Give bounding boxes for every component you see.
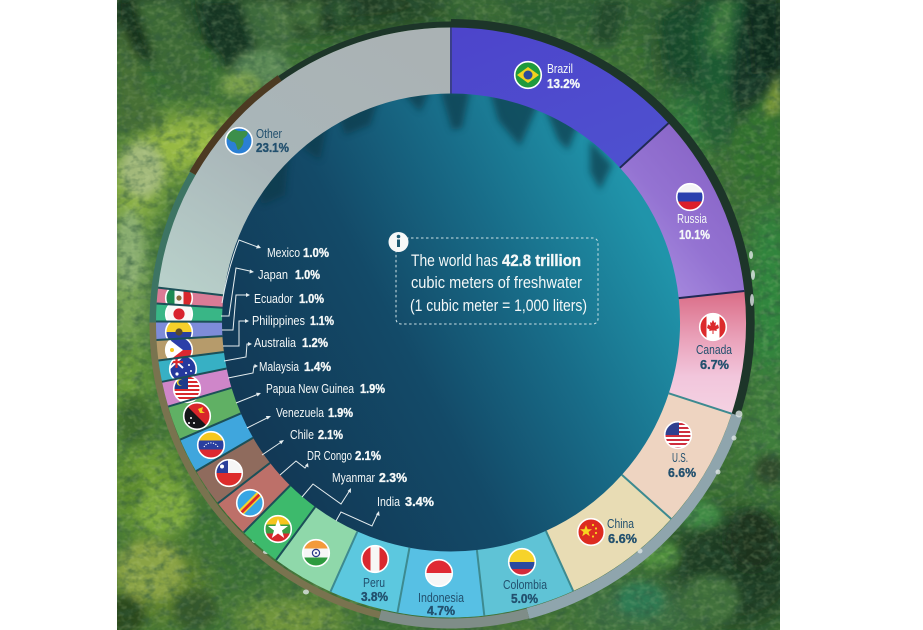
segment: Other 23.1% — [158, 28, 451, 295]
segment: Indonesia 4.7% — [398, 548, 484, 618]
label: DR Congo: DR Congo — [307, 448, 352, 463]
icon: flag of Venezuela — [198, 432, 224, 458]
callout: total freshwater: (1 cubic meter = 1,000 liters) — [410, 296, 587, 315]
segment: Canada 6.7%: 6.7% — [700, 357, 729, 372]
segment: U.S. 6.6%: U.S. — [672, 450, 688, 465]
segment: Indonesia 4.7%: 4.7% — [427, 603, 455, 618]
segment: Brazil 13.2% — [451, 27, 668, 168]
icon: flag of India — [303, 540, 329, 566]
segment: Canada 6.7% — [669, 291, 746, 414]
segment: China 6.6%: 6.6% — [608, 531, 637, 546]
label: Philippines: Philippines — [252, 313, 305, 328]
segment: Mexico 1.0% — [157, 285, 224, 311]
segment: Canada 6.7%: Canada — [696, 342, 733, 357]
label: India — [336, 494, 434, 526]
icon: flag of Peru — [362, 546, 388, 572]
label: Venezuela: 1.9% — [328, 405, 353, 420]
segment: Russia 10.1% — [620, 123, 744, 298]
label: Venezuela: Venezuela — [276, 405, 325, 420]
icon: flag of Ecuador — [164, 322, 194, 338]
icon: flag of Colombia — [509, 549, 535, 576]
segment: Colombia 5.0% — [477, 531, 573, 616]
label: Australia: 1.2% — [302, 335, 328, 350]
icon: info — [388, 232, 408, 252]
icon: flag of Papua New Guinea — [184, 403, 210, 429]
label: Australia — [224, 335, 328, 361]
label: Ecuador — [222, 291, 324, 330]
segment: Japan 1.0% — [156, 304, 222, 321]
segment: Ecuador 1.0% — [156, 322, 222, 340]
segment: Indonesia 4.7%: Indonesia — [418, 590, 465, 605]
callout labels for the smallest countries — [221, 240, 434, 526]
label: Chile — [262, 427, 343, 455]
segment: China 6.6% — [546, 475, 671, 591]
segment: Brazil 13.2%: 13.2% — [547, 76, 580, 91]
icon: flag of Japan — [166, 301, 192, 327]
icon: flag of Mexico — [166, 285, 192, 311]
label: Mexico — [222, 240, 329, 303]
segment: Colombia 5.0%: 5.0% — [511, 591, 538, 606]
icon: flag of Brazil — [515, 62, 541, 88]
label: Papua New Guinea — [236, 381, 385, 403]
label: Myanmar — [302, 470, 407, 504]
icon: flag of Canada — [700, 314, 726, 340]
icon: flag of Australia — [170, 356, 196, 382]
segment: Russia 10.1%: Russia — [677, 211, 708, 226]
segment: Other 23.1%: 23.1% — [256, 140, 289, 155]
label: India: 3.4% — [405, 494, 434, 509]
segment: Australia 1.2% — [158, 352, 227, 382]
background: aerial forest and grass photo — [100, 0, 805, 630]
segment: Papua New Guinea 1.9% — [168, 388, 241, 440]
icon: globe — [226, 128, 252, 154]
label: Malaysia: 1.4% — [304, 359, 331, 374]
label: Mexico: Mexico — [267, 245, 300, 260]
segment: U.S. 6.6% — [622, 393, 732, 519]
icon: flag of Chile — [216, 460, 242, 486]
segment: Philippines 1.1% — [156, 336, 224, 363]
callout: total freshwater: cubic meters of freshwater — [411, 273, 582, 292]
icon: flag of the Philippines — [164, 339, 194, 358]
label: Japan — [221, 267, 320, 316]
label: Chile: 2.1% — [318, 427, 343, 442]
icon: flag of DR Congo — [237, 490, 264, 517]
label: Myanmar: Myanmar — [332, 470, 376, 485]
label: Chile: Chile — [290, 427, 314, 442]
label: Ecuador: 1.0% — [299, 291, 324, 306]
lake with tree reflections — [219, 90, 683, 554]
label: DR Congo — [280, 448, 381, 475]
segment: DR Congo 2.1% — [218, 463, 290, 532]
segment: Chile 2.1% — [196, 438, 270, 503]
icon: flag of Malaysia — [174, 376, 200, 402]
shoreline rocks — [252, 251, 755, 594]
label: Australia: Australia — [254, 335, 297, 350]
segment: Venezuela 1.9% — [180, 413, 253, 471]
lakeshore ring — [153, 23, 750, 624]
segment: Peru 3.8%: Peru — [363, 575, 385, 590]
segment: Brazil 13.2%: Brazil — [547, 61, 573, 76]
label: Japan: Japan — [258, 267, 288, 282]
callout: total freshwater — [388, 232, 598, 324]
label: Mexico: 1.0% — [303, 245, 329, 260]
segment: Peru 3.8%: 3.8% — [361, 589, 388, 604]
segment: Russia 10.1%: 10.1% — [679, 227, 710, 242]
icon: flag of China — [578, 519, 604, 545]
label: Myanmar: 2.3% — [379, 470, 407, 485]
segment: U.S. 6.6%: 6.6% — [668, 465, 696, 480]
label: Malaysia: Malaysia — [259, 359, 300, 374]
label: Japan: 1.0% — [295, 267, 320, 282]
segment: Other 23.1%: Other — [256, 126, 283, 141]
donut chart: share of world freshwater — [156, 27, 746, 618]
icon: flag of Indonesia — [426, 560, 452, 586]
segment: Myanmar 2.3% — [244, 486, 315, 560]
label: India: India — [377, 494, 401, 509]
label: Venezuela — [247, 405, 353, 428]
icon: flag of the U.S. — [665, 422, 691, 449]
segment: Peru 3.8% — [330, 532, 410, 613]
label: Malaysia — [228, 359, 331, 378]
icon: flag of Russia — [677, 184, 703, 210]
callout: total freshwater: 42.8 trillion — [502, 251, 581, 270]
label: Papua New Guinea: 1.9% — [360, 381, 385, 396]
segment: China 6.6%: China — [607, 516, 635, 531]
segment: Malaysia 1.4% — [162, 368, 232, 407]
label: Papua New Guinea: Papua New Guinea — [266, 381, 355, 396]
label: Philippines — [223, 313, 334, 346]
callout: total freshwater: The world has — [411, 251, 498, 270]
label: Philippines: 1.1% — [310, 313, 334, 328]
label: Ecuador: Ecuador — [254, 291, 294, 306]
segment: India 3.4% — [276, 507, 357, 592]
segment: Colombia 5.0%: Colombia — [503, 577, 548, 592]
icon: flag of Myanmar — [265, 516, 291, 542]
label: DR Congo: 2.1% — [355, 448, 381, 463]
